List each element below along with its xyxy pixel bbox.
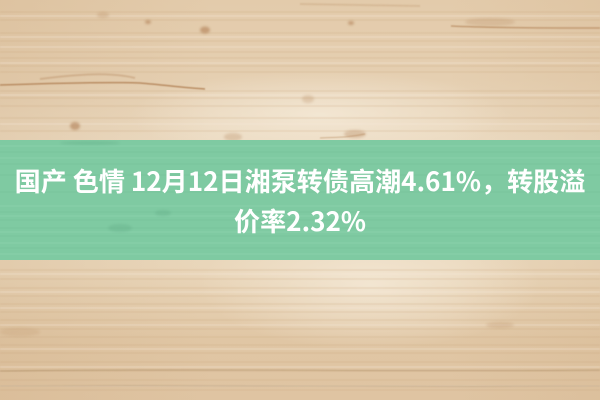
green banner — [0, 140, 600, 260]
title — [15, 161, 585, 239]
title: 价率2.32% — [234, 201, 366, 239]
title: 国产 色情 12月12日湘泵转债高潮4.61%，转股溢 — [15, 161, 585, 199]
